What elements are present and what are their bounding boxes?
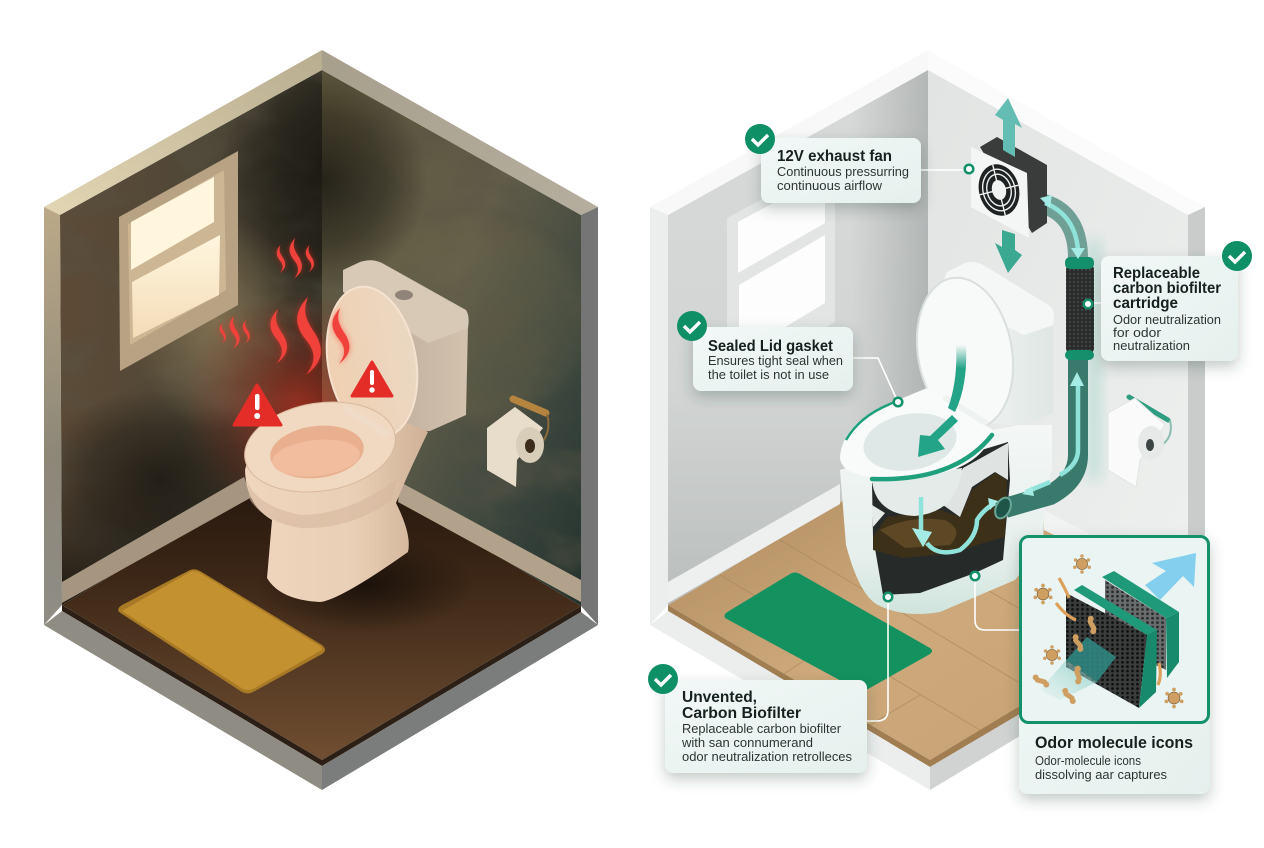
panel: right solution room bbox=[650, 50, 1205, 790]
icon: check cartridge bbox=[1222, 241, 1252, 271]
callout: sealed lid gasket: Sealed Lid gasket bbox=[708, 338, 833, 355]
airflow arrow down bbox=[995, 230, 1022, 273]
slab front right bbox=[930, 708, 1030, 790]
panel: left smelly room bbox=[40, 50, 598, 790]
icon: check biofilter bbox=[648, 664, 678, 694]
cutaway cavity bbox=[872, 442, 1010, 595]
callout: unvented carbon biofilter: Replaceable carbon biofilter bbox=[682, 721, 842, 736]
baseboard left bbox=[668, 484, 840, 603]
left side face bbox=[44, 207, 62, 625]
teal glow by duct bbox=[1088, 240, 1100, 480]
right side face bbox=[1188, 207, 1205, 625]
callout: odor molecule icons: dissolving aar captures bbox=[1035, 767, 1167, 782]
tank body bbox=[947, 285, 1053, 426]
callout: unvented carbon biofilter: Unvented, bbox=[682, 689, 757, 706]
warning icon left bbox=[234, 385, 281, 425]
lid bbox=[315, 280, 429, 444]
left side face bbox=[650, 207, 668, 625]
flush button bbox=[395, 290, 413, 300]
toilet bbox=[840, 262, 1054, 614]
callout: odor molecule icons: Odor-molecule icons bbox=[1035, 753, 1141, 768]
baseboard left bbox=[62, 477, 252, 603]
duct mouth bbox=[992, 495, 1014, 521]
icon: check gasket bbox=[677, 311, 707, 341]
back filter mesh bbox=[1105, 580, 1166, 670]
toilet paper bbox=[1108, 397, 1171, 487]
gasket back rim bbox=[846, 402, 895, 440]
lid bbox=[906, 270, 1024, 436]
tank lid bbox=[940, 262, 1054, 335]
floor plank lines bbox=[720, 505, 1100, 730]
floor thin edge bbox=[62, 605, 581, 766]
seat bbox=[238, 392, 402, 502]
callout: replaceable cartridge: cartridge bbox=[1113, 295, 1178, 312]
front panel side frame bbox=[1139, 630, 1157, 708]
toilet paper bbox=[487, 399, 548, 487]
callout: 12V exhaust fan: continuous airflow bbox=[777, 178, 883, 193]
fan bbox=[971, 137, 1047, 238]
blue airflow arrow bbox=[1145, 553, 1196, 600]
callout: sealed lid gasket bbox=[693, 327, 853, 391]
callout: replaceable cartridge: Odor neutralization bbox=[1113, 312, 1221, 327]
bowl shade bbox=[247, 478, 398, 528]
slab front left bbox=[650, 611, 930, 790]
wood floor bbox=[668, 450, 1188, 760]
top rim right bbox=[928, 50, 1205, 215]
leader dots bbox=[884, 165, 1092, 601]
body bbox=[840, 425, 1052, 614]
callout: odor molecule icons bbox=[1019, 535, 1210, 794]
back panel top frame bbox=[1102, 571, 1179, 618]
top rim right bbox=[322, 50, 598, 215]
top rim left bbox=[650, 50, 928, 215]
left fin bbox=[872, 505, 885, 527]
right wall bbox=[322, 70, 581, 606]
leader lines bbox=[853, 170, 1101, 721]
right side face bbox=[581, 207, 598, 625]
callout: unvented carbon biofilter: odor neutralization retrolleces bbox=[682, 749, 852, 764]
odor molecules bbox=[1031, 554, 1184, 708]
callout: replaceable cartridge: Replaceable bbox=[1113, 265, 1200, 282]
callout: odor molecule icons: Odor molecule icons bbox=[1035, 733, 1193, 752]
toilet bbox=[238, 260, 469, 602]
carbon cartridge bbox=[1065, 257, 1094, 360]
callout: replaceable cartridge: neutralization bbox=[1113, 338, 1190, 353]
callout: sealed lid gasket: Ensures tight seal when bbox=[708, 353, 843, 368]
wall smoke and light bbox=[40, 70, 590, 610]
back panel side frame bbox=[1166, 612, 1179, 678]
white baffle bbox=[943, 443, 1008, 517]
duct lower bbox=[1005, 355, 1078, 508]
bowl opening bbox=[859, 406, 961, 478]
inset frame bbox=[1020, 536, 1208, 722]
front filter mesh bbox=[1066, 593, 1147, 708]
left wall corner shade bbox=[668, 70, 928, 605]
callout: 12V exhaust fan: 12V exhaust fan bbox=[777, 148, 892, 165]
callout: replaceable cartridge: for odor bbox=[1113, 325, 1162, 340]
bowl and pedestal bbox=[245, 420, 428, 602]
window bbox=[727, 160, 835, 385]
green flow arrow in bowl bbox=[918, 415, 958, 457]
airflow arrowheads bbox=[912, 195, 1085, 547]
slab front right bbox=[322, 612, 598, 790]
right wall bbox=[928, 70, 1188, 606]
green flow arrow in lid bbox=[948, 345, 966, 412]
tank lid bbox=[343, 260, 469, 343]
toilet floor shadow bbox=[255, 535, 475, 635]
callout: 12V exhaust fan: Continuous pressurring bbox=[777, 164, 909, 179]
bowl opening bbox=[267, 420, 367, 484]
green rug bbox=[724, 572, 932, 690]
callout: replaceable cartridge: carbon biofilter bbox=[1113, 280, 1221, 297]
slab front left bbox=[44, 611, 322, 790]
bowl underside bbox=[872, 468, 962, 516]
window bbox=[119, 151, 238, 371]
floor edge bbox=[668, 605, 1030, 767]
seat bbox=[840, 388, 993, 478]
callout: 12V exhaust fan bbox=[761, 138, 921, 203]
duct upper elbow bbox=[1040, 203, 1078, 258]
teal beam bbox=[1066, 637, 1116, 682]
rug bbox=[118, 569, 325, 694]
callout: replaceable cartridge bbox=[1101, 256, 1238, 361]
hinge bbox=[942, 394, 989, 427]
left wall bbox=[60, 70, 322, 605]
compost highlights bbox=[880, 519, 956, 548]
pale air cone bbox=[1040, 660, 1097, 700]
callout: unvented carbon biofilter: Carbon Biofilter bbox=[682, 705, 801, 722]
callout: sealed lid gasket: the toilet is not in use bbox=[708, 367, 829, 382]
gasket front rim bbox=[872, 435, 992, 479]
callout: unvented carbon biofilter: with san connumerand bbox=[681, 735, 813, 750]
odor flames bbox=[220, 238, 349, 375]
left wall bbox=[668, 70, 928, 605]
baseboard right bbox=[1044, 510, 1188, 602]
compost bbox=[873, 473, 1007, 558]
hinge bbox=[341, 404, 391, 439]
icon: check 12V bbox=[745, 124, 775, 154]
front panel top frame bbox=[1074, 585, 1157, 635]
warning icon right bbox=[352, 362, 392, 396]
airflow arrow up bbox=[995, 98, 1022, 157]
airflow inside ducts bbox=[921, 203, 1078, 552]
callout: unvented carbon biofilter bbox=[665, 680, 867, 773]
floor bbox=[62, 450, 581, 760]
baseboard right bbox=[398, 482, 581, 602]
top rim left bbox=[44, 50, 322, 215]
tank body bbox=[345, 290, 468, 432]
